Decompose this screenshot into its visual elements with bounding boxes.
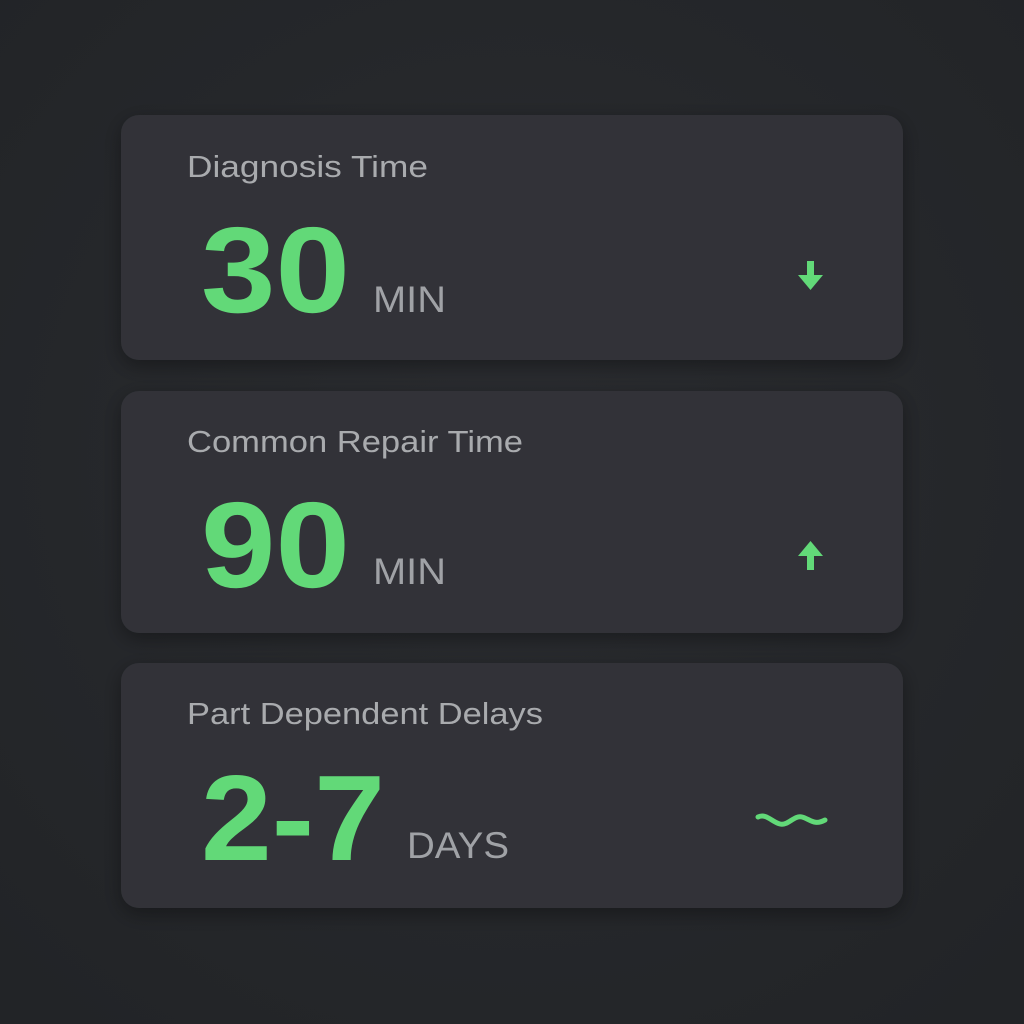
value: 30 min: 30 [201,202,350,338]
panel: part dependent delays [121,663,903,908]
heading: diagnosis time: Diagnosis Time [187,149,428,184]
icon: down arrow [798,261,823,290]
value: 2-7 days: DAYS [407,825,509,866]
value: 90 min: MIN [373,551,446,592]
value: 2-7 days [201,750,509,886]
value: 90 min: 90 [201,477,350,613]
panel: common repair time [121,391,903,633]
heading: part dependent delays: Part Dependent Delays [187,696,543,731]
value: 30 min [201,202,446,338]
value: 90 min [201,477,446,613]
value: 2-7 days: 2-7 [201,750,385,886]
icon: wave [758,816,825,824]
value: 30 min: MIN [373,279,446,320]
panel: diagnosis time [121,115,903,360]
heading: common repair time: Common Repair Time [187,424,523,459]
icon: up arrow [798,541,823,570]
